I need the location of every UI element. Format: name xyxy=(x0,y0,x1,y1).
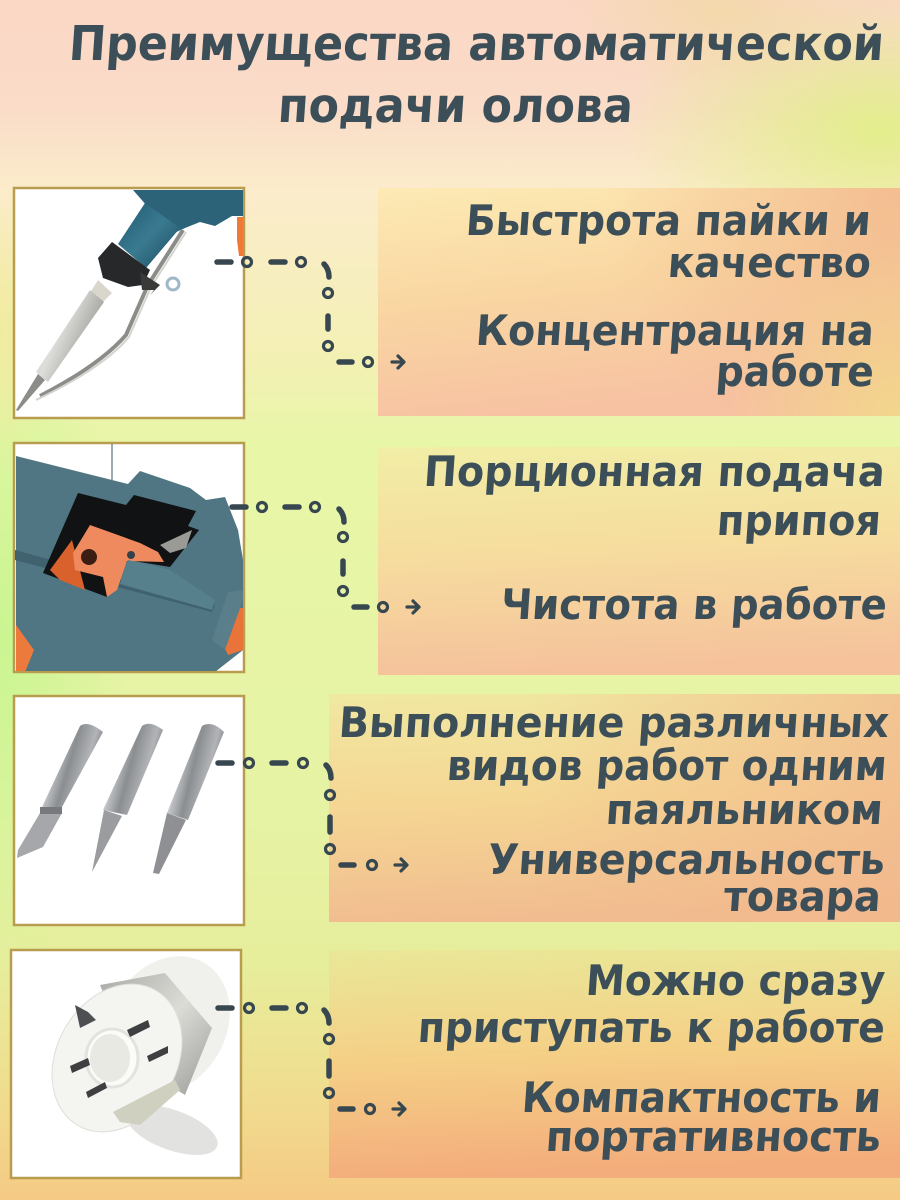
photo: solder wire spool xyxy=(11,934,254,1178)
panel 3 background xyxy=(329,694,900,922)
connector arrow 1 xyxy=(217,258,404,368)
panel 3 text: товара xyxy=(722,872,883,921)
panel 3 text: Универсальность xyxy=(486,835,887,884)
title xyxy=(67,16,886,134)
panel 2 text xyxy=(422,447,889,629)
panel 3 text xyxy=(337,698,891,921)
panel 1 text xyxy=(464,196,876,396)
panel: ready to work and portability xyxy=(329,950,900,1178)
panel 4 text: портативность xyxy=(544,1112,883,1161)
photo: feed mechanism xyxy=(14,443,244,672)
panel 4 text: Можно сразу xyxy=(584,956,887,1005)
panel 4 background xyxy=(329,950,900,1178)
title: подачи олова xyxy=(276,78,635,134)
panel 1 text: Быстрота пайки и xyxy=(464,196,873,245)
connector arrow 3 xyxy=(218,758,407,871)
panel 2 background xyxy=(378,447,900,675)
panel 4 text: Компактность и xyxy=(520,1073,883,1122)
panel 1 text: Концентрация на xyxy=(474,306,876,355)
panel 2 text: припоя xyxy=(715,496,883,545)
panel 4 text xyxy=(416,956,887,1161)
panel 1 text: работе xyxy=(714,347,876,396)
panel 2 text: Порционная подача xyxy=(422,447,887,496)
connector arrow 4 xyxy=(218,1004,405,1115)
panel 3 text: паяльником xyxy=(604,785,885,834)
panel 1 text: качество xyxy=(666,238,873,287)
panel: versatility xyxy=(329,694,900,922)
connector arrow 2 xyxy=(232,502,419,613)
photo: three soldering tips xyxy=(14,696,244,925)
panel 1 background xyxy=(378,188,900,416)
panel: speed and concentration xyxy=(378,188,900,416)
panel: portioned feed and cleanliness xyxy=(378,447,900,675)
photo: soldering gun head xyxy=(14,188,244,418)
